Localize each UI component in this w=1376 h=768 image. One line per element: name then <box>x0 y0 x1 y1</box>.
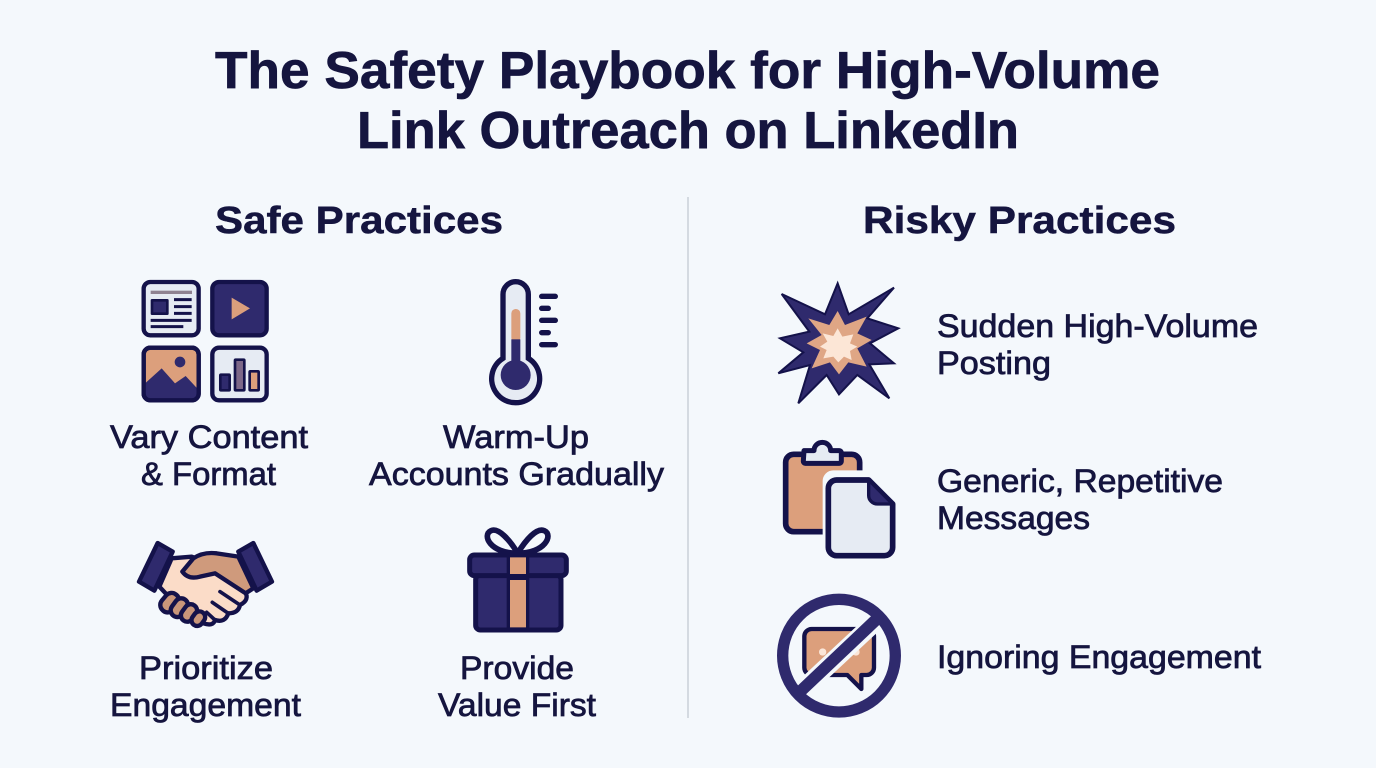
label: warm-up accounts gradually: Warm-Up <box>443 419 589 455</box>
label: vary content and format: Vary Content <box>110 419 308 455</box>
icon: thermometer <box>492 282 555 403</box>
title: Link Outreach on LinkedIn <box>357 102 1019 160</box>
label: sudden high-volume posting: Posting <box>937 345 1051 381</box>
label: generic repetitive messages <box>937 463 1223 536</box>
label: generic repetitive messages: Generic, Repetitive <box>937 463 1223 499</box>
title <box>215 42 1160 160</box>
label: prioritize engagement: Prioritize <box>139 650 273 686</box>
icon: gift box <box>470 530 566 630</box>
icon: no chat prohibited <box>783 599 895 712</box>
label: provide value first: Value First <box>438 687 596 723</box>
label: warm-up accounts gradually: Accounts Gradually <box>369 456 664 492</box>
heading: safe practices: Safe Practices <box>215 200 503 242</box>
label: provide value first: Provide <box>460 650 574 686</box>
label: vary content and format: & Format <box>141 456 276 492</box>
label: generic repetitive messages: Messages <box>937 500 1090 536</box>
icon: handshake <box>139 543 272 628</box>
label: prioritize engagement <box>110 650 301 723</box>
icon: clipboard and document <box>786 442 899 559</box>
title: The Safety Playbook for High-Volume <box>215 42 1160 100</box>
label: provide value first <box>438 650 596 723</box>
label: warm-up accounts gradually <box>369 419 664 492</box>
label: prioritize engagement: Engagement <box>110 687 301 723</box>
label: sudden high-volume posting <box>937 308 1258 381</box>
label: vary content and format <box>110 419 308 492</box>
icon: explosion burst <box>778 283 898 403</box>
icon: content formats <box>144 282 267 400</box>
heading: risky practices: Risky Practices <box>863 200 1176 242</box>
label: ignoring engagement: Ignoring Engagement <box>937 639 1261 675</box>
label: sudden high-volume posting: Sudden High-Volume <box>937 308 1258 344</box>
